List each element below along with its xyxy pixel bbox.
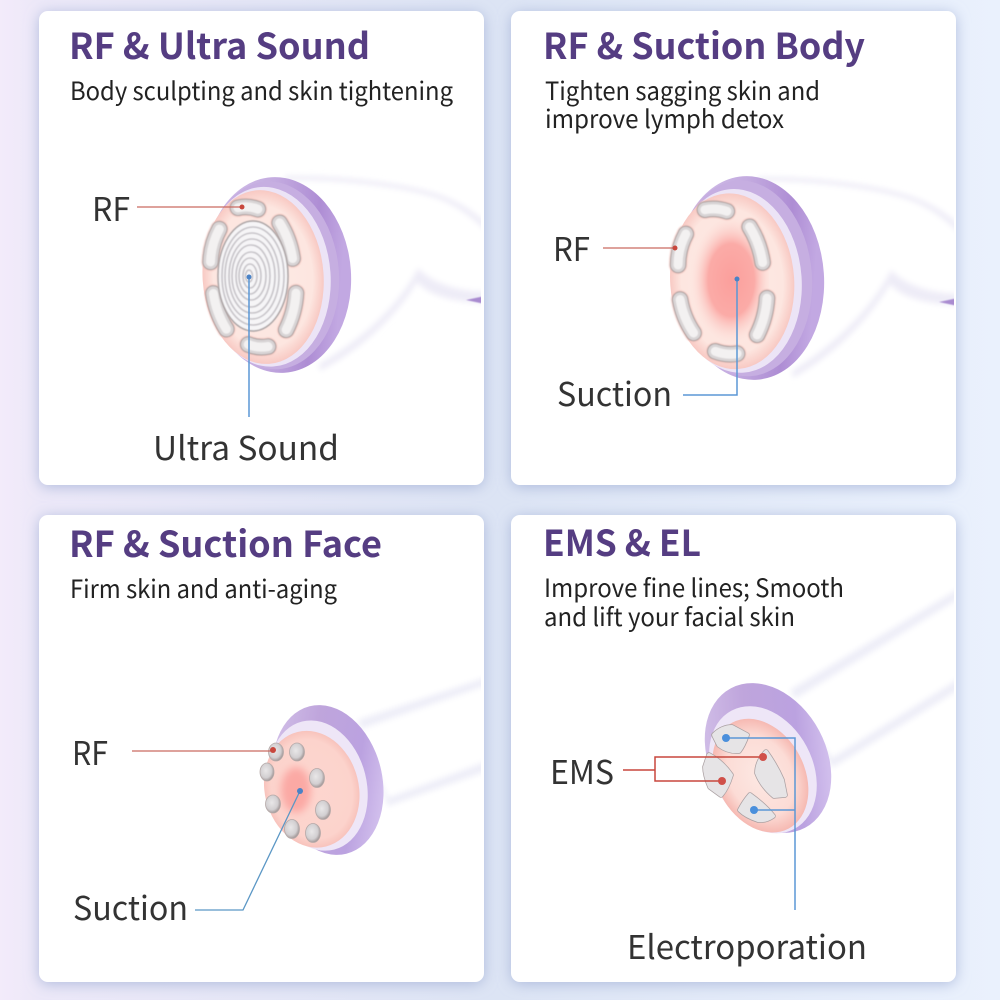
description: body sculpting: Body sculpting and skin tightening bbox=[70, 72, 453, 108]
icon: RF electrode pills bbox=[209, 206, 298, 348]
heading: RF and Ultra Sound: RF & Ultra Sound bbox=[69, 18, 370, 70]
callout: EMS bbox=[550, 746, 767, 794]
description: improve fine lines: Improve fine lines; Smooth bbox=[544, 569, 844, 605]
icon: RF electrode pills bbox=[676, 208, 769, 355]
icon: suction cup bbox=[281, 767, 311, 813]
device: RF and face suction head bbox=[260, 679, 481, 855]
description: improve fine lines bbox=[544, 569, 844, 634]
icon: electrode pads bbox=[705, 727, 785, 820]
heading: RF and Suction Body: RF & Suction Body bbox=[543, 18, 865, 70]
callout: EMS: EMS bbox=[550, 746, 614, 794]
panel: RF and Suction Body bbox=[511, 11, 963, 485]
callout: Electroporation: Electroporation bbox=[627, 921, 867, 969]
callout: Ultra Sound bbox=[153, 274, 339, 470]
callout: Suction: Suction bbox=[73, 882, 188, 930]
icon: ultrasound plate bbox=[218, 221, 288, 331]
heading: RF and Suction Face: RF & Suction Face bbox=[69, 516, 382, 568]
icon: suction cup bbox=[685, 214, 769, 346]
device: RF and body suction head bbox=[663, 171, 963, 385]
description: firm skin: Firm skin and anti-aging bbox=[70, 570, 337, 606]
device: EMS and EL head bbox=[702, 592, 954, 834]
description: tighten sagging skin bbox=[545, 72, 820, 136]
callout: Ultra Sound: Ultra Sound bbox=[153, 422, 339, 470]
callout: Suction: Suction bbox=[557, 368, 672, 416]
description: tighten sagging skin: improve lymph detox bbox=[545, 100, 785, 136]
panel: EMS and EL bbox=[511, 515, 963, 982]
callout: RF: RF bbox=[92, 183, 130, 231]
description: tighten sagging skin: Tighten sagging skin and bbox=[545, 72, 820, 108]
callout: RF bbox=[72, 727, 276, 775]
icon: electrode pad outlines bbox=[705, 727, 785, 820]
icon: RF electrode dots bbox=[260, 743, 330, 842]
description: improve fine lines: and lift your facial skin bbox=[544, 598, 795, 634]
callout: RF bbox=[553, 223, 678, 271]
callout: RF: RF bbox=[553, 223, 590, 271]
heading: EMS and EL: EMS & EL bbox=[543, 515, 701, 567]
callout: Suction bbox=[557, 276, 740, 416]
device: RF and ultrasound head bbox=[196, 172, 490, 378]
panel: RF and Ultra Sound bbox=[39, 11, 490, 485]
callout: RF: RF bbox=[72, 727, 108, 775]
panel: RF and Suction Face bbox=[39, 515, 490, 982]
callout: Suction bbox=[73, 788, 303, 930]
callout: RF bbox=[92, 183, 244, 231]
callout: Electroporation bbox=[627, 734, 867, 969]
